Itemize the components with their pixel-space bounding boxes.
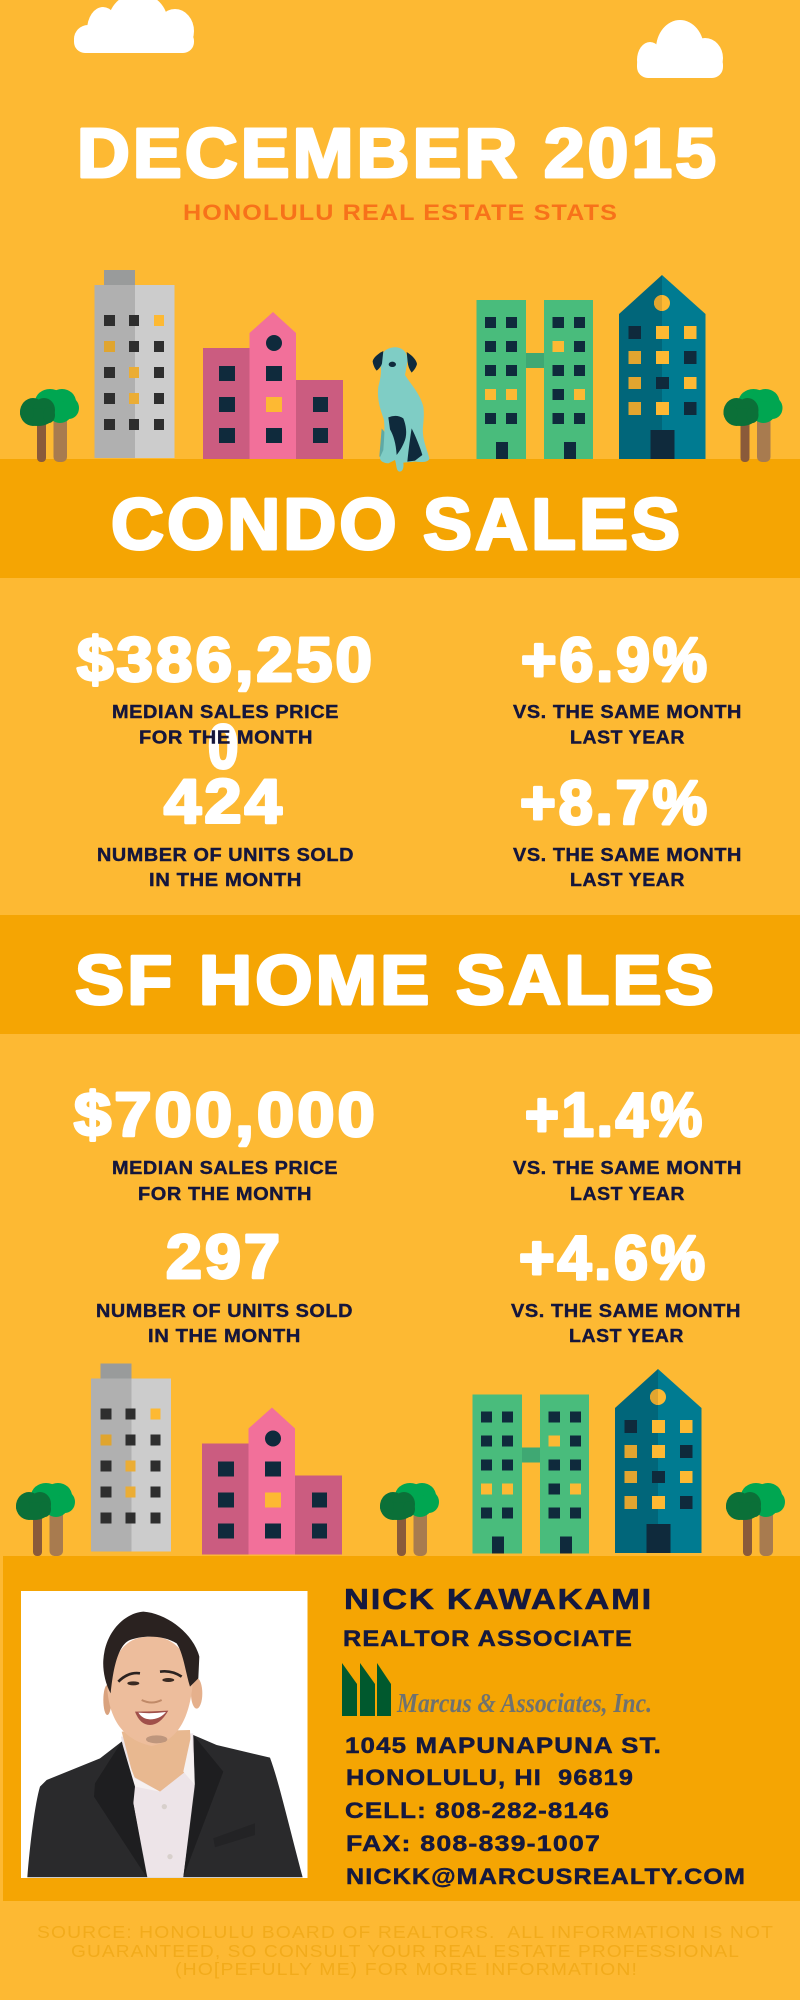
title: DECEMBER 2015 [77,114,719,192]
stat: condo median price [77,626,375,748]
contact details: 1045 MAPUNAPUNA ST. [345,1733,662,1758]
stat: condo price change: +6.9% [521,626,710,695]
icon: lower blue building [615,1369,702,1553]
stat: condo units change: VS. THE SAME MONTH [513,845,742,865]
contact details: NICKK@MARCUSREALTY.COM [346,1864,746,1889]
icon: seated dog [373,347,429,472]
icon: left cloud [74,0,194,53]
stat: sf price change [513,1081,742,1204]
icon: pink building [203,312,343,459]
stat: sf median price [74,1081,378,1204]
stat: sf price change: LAST YEAR [570,1184,685,1204]
icon: right cloud [637,20,723,78]
stat: condo units sold: 424 [164,768,285,836]
stray digit: 0 [208,713,241,782]
icon: green twin towers [476,300,593,459]
stat: sf units sold: 297 [166,1223,283,1292]
stat: sf median price: MEDIAN SALES PRICE [112,1158,338,1178]
stat: sf median price: FOR THE MONTH [138,1184,312,1204]
stat: condo median price: $386,250 [77,626,375,695]
stat: condo price change: VS. THE SAME MONTH [513,702,742,722]
stat: sf price change: +1.4% [525,1081,705,1150]
stat: sf median price: $700,000 [74,1081,378,1150]
stat: sf units change: LAST YEAR [569,1326,684,1346]
icon: tree left [20,389,79,462]
agent role: REALTOR ASSOCIATE [343,1626,633,1651]
icon: grey tower [94,270,174,458]
contact details: HONOLULU, HI 96819 [346,1765,634,1790]
source note: (HO[PEFULLY ME) FOR MORE INFORMATION! [175,1959,638,1979]
stat: sf units sold: IN THE MONTH [148,1326,301,1346]
icon: lower green towers [472,1394,589,1554]
company logo: Marcus & Associates, Inc. [396,1688,652,1718]
heading: condo sales: CONDO SALES [111,485,683,565]
icon: blue gabled building [619,275,706,459]
icon: lower left tree [16,1483,75,1556]
icon: lower middle tree [380,1483,439,1556]
agent photo [21,1591,308,1878]
subtitle: HONOLULU REAL ESTATE STATS [183,200,618,225]
stat: sf units change: +4.6% [519,1224,708,1293]
stat: sf units sold: NUMBER OF UNITS SOLD [96,1301,353,1321]
source note [37,1922,774,1979]
icon: lower right tree [726,1483,785,1556]
stat: sf units change: VS. THE SAME MONTH [511,1301,741,1321]
stat: condo units sold: NUMBER OF UNITS SOLD [97,845,354,865]
stat: condo units change: LAST YEAR [570,870,685,890]
contact details: CELL: 808-282-8146 [345,1798,610,1823]
contact details [345,1733,746,1889]
stat: condo median price: MEDIAN SALES PRICE [112,702,339,722]
stat: sf units change [511,1224,741,1346]
stat: condo units change [513,769,742,890]
band: condo sales [0,459,800,578]
stat: condo price change: LAST YEAR [570,728,685,748]
panel: agent contact [3,1556,800,1901]
band: sf home sales [0,915,800,1034]
stat: sf units sold [96,1223,353,1346]
source note: GUARANTEED, SO CONSULT YOUR REAL ESTATE PROFESSIONAL [71,1941,740,1961]
stat: condo price change [513,626,742,748]
company logo [342,1663,652,1718]
stat: condo units change: +8.7% [520,769,710,838]
heading: sf home sales: SF HOME SALES [75,941,717,1019]
source note: SOURCE: HONOLULU BOARD OF REALTORS. ALL INFORMATION IS NOT [37,1922,774,1942]
stat: sf price change: VS. THE SAME MONTH [513,1158,742,1178]
icon: lower grey tower [91,1364,171,1552]
stat: condo median price: FOR THE MONTH [139,728,313,748]
icon: tree right [724,389,782,462]
contact details: FAX: 808-839-1007 [346,1831,601,1856]
stat: condo units sold: IN THE MONTH [149,870,302,890]
icon: lower pink building [202,1408,342,1554]
agent name: NICK KAWAKAMI [344,1584,653,1616]
stat: condo units sold [97,768,354,890]
